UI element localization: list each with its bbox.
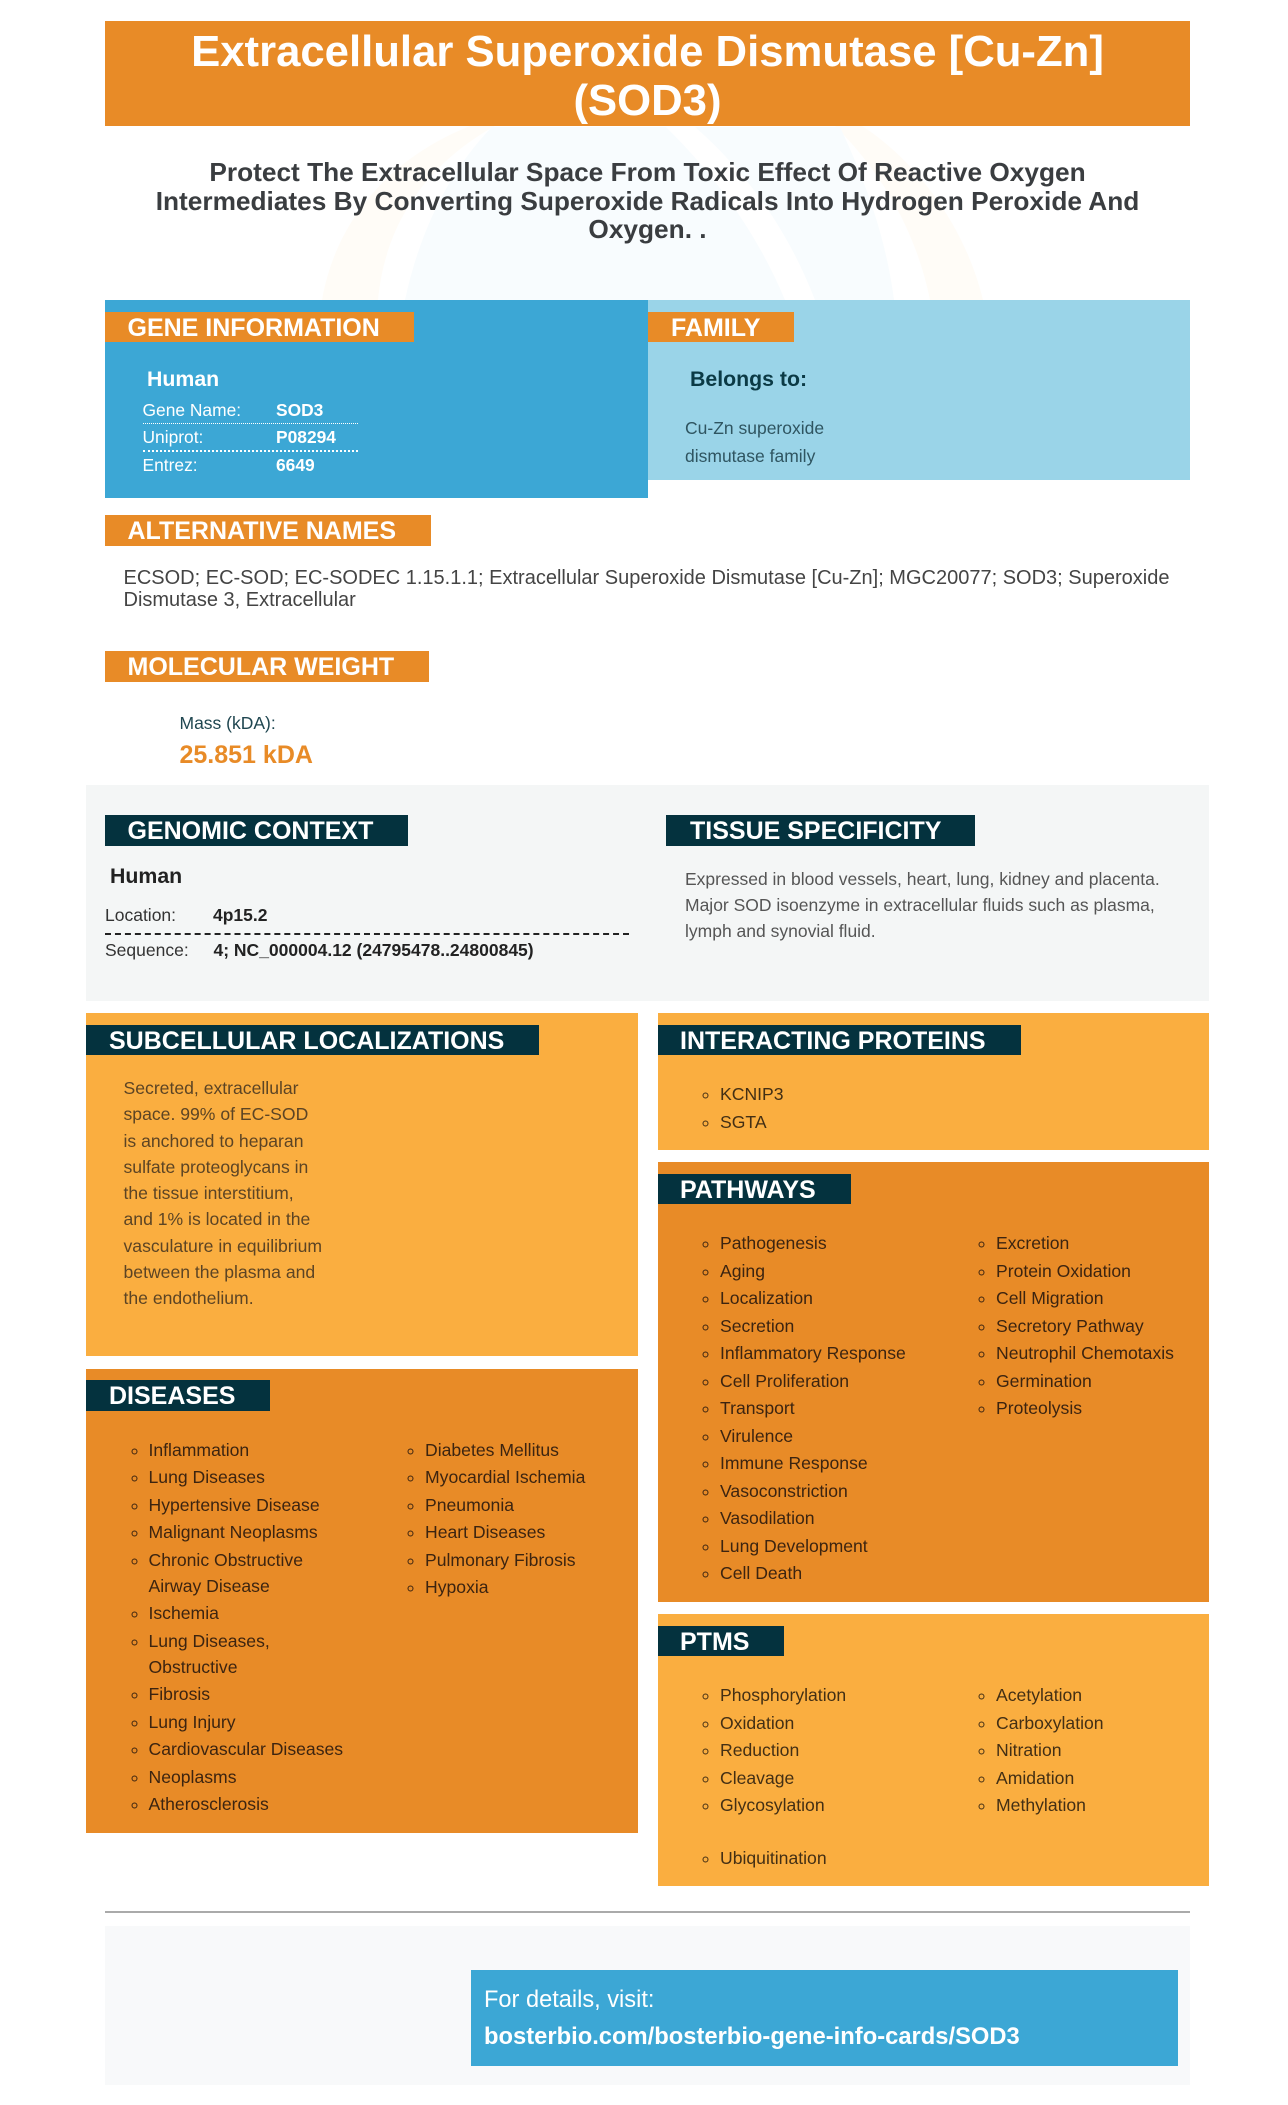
- pathway list column 2: Proteolysis: [996, 1398, 1082, 1418]
- disease list column 1: Atherosclerosis: [148, 1794, 269, 1814]
- protein list: SGTA: [720, 1112, 767, 1132]
- pathway list column 1: Secretion: [720, 1316, 794, 1336]
- pathway list column 1: Aging: [720, 1260, 765, 1280]
- panel: diseases: [86, 1369, 638, 1833]
- alternative names text: ECSOD; EC-SOD; EC-SODEC 1.15.1.1; Extracellular Superoxide Dismutase [Cu-Zn]; MGC20077; SOD3; Superoxide Dismutase 3, Extracellular: [124, 567, 1169, 611]
- background watermark logo: [0, 0, 1288, 310]
- pathway list column 2: [978, 1233, 1174, 1418]
- tissue specificity text: lymph and synovial fluid.: [685, 921, 876, 941]
- heading: subcellular localizations: SUBCELLULAR LOCALIZATIONS: [109, 1027, 504, 1055]
- ptm list column 1: Reduction: [720, 1740, 799, 1760]
- panel: family: [648, 300, 1190, 480]
- family text: Cu-Zn superoxide: [685, 418, 824, 438]
- ptm list column 2: Nitration: [996, 1740, 1062, 1760]
- gene name row: Gene Name:: [142, 400, 241, 420]
- ptm list column 2: Methylation: [996, 1795, 1086, 1815]
- pathway list column 1: Cell Death: [720, 1563, 802, 1583]
- ptm list column 1: Phosphorylation: [720, 1685, 846, 1705]
- pathway list column 1: Vasoconstriction: [720, 1480, 848, 1500]
- mass label: Mass (kDA):: [180, 713, 276, 733]
- pathway list column 1: Cell Proliferation: [720, 1370, 849, 1390]
- disease list column 2: [408, 1440, 586, 1597]
- heading: diseases: DISEASES: [109, 1382, 235, 1410]
- panel: subcellular localizations: [86, 1013, 638, 1356]
- panel: genomic context and tissue specificity: [86, 785, 1209, 1001]
- ptm list column 2: Carboxylation: [996, 1712, 1104, 1732]
- location row: Location:: [105, 905, 176, 925]
- disease list column 1: Malignant Neoplasms: [148, 1522, 318, 1542]
- disease list column 2: Pulmonary Fibrosis: [425, 1550, 576, 1570]
- ptm list extra item: Ubiquitination: [720, 1848, 827, 1868]
- details label: For details, visit:: [484, 1987, 654, 2013]
- heading: molecular weight: MOLECULAR WEIGHT: [128, 653, 394, 681]
- gene name row: SOD3: [276, 400, 323, 420]
- ptm list column 2: [978, 1685, 1104, 1815]
- pathway list column 1: Virulence: [720, 1426, 793, 1446]
- tissue specificity text: [685, 869, 1160, 941]
- localization text: space. 99% of EC-SOD: [124, 1104, 308, 1124]
- family text: dismutase family: [685, 446, 815, 466]
- panel: pathways: [658, 1162, 1209, 1602]
- disease list column 1: Chronic Obstructive: [148, 1550, 303, 1570]
- disease list column 1: Neoplasms: [148, 1766, 237, 1786]
- heading: interacting proteins: INTERACTING PROTEINS: [680, 1027, 986, 1055]
- disease list column 2: Hypoxia: [425, 1577, 489, 1597]
- ptm list column 1: Oxidation: [720, 1712, 794, 1732]
- localization text: between the plasma and: [124, 1262, 315, 1282]
- localization text: sulfate proteoglycans in: [124, 1157, 308, 1177]
- localization text: the endothelium.: [124, 1288, 254, 1308]
- molecular weight value: [180, 713, 313, 769]
- belongs to label: Belongs to:: [690, 366, 807, 390]
- uniprot row: [142, 424, 358, 452]
- localization text: vasculature in equilibrium: [124, 1236, 322, 1256]
- disease list column 2: Diabetes Mellitus: [425, 1440, 559, 1460]
- protein list: [702, 1084, 784, 1132]
- pathway list column 1: Immune Response: [720, 1453, 868, 1473]
- disease list column 1: Ischemia: [148, 1603, 219, 1623]
- disease list column 1: Lung Diseases,: [148, 1630, 270, 1650]
- location row: [105, 902, 629, 935]
- pathway list column 1: Inflammatory Response: [720, 1343, 906, 1363]
- localization text: is anchored to heparan: [124, 1130, 303, 1150]
- species label: Human: [147, 366, 219, 390]
- subtitle: protein function: [156, 157, 1139, 244]
- tissue specificity text: Major SOD isoenzyme in extracellular fluids such as plasma,: [685, 895, 1155, 915]
- disease list column 1: Hypertensive Disease: [148, 1494, 320, 1514]
- localization text: [124, 1078, 322, 1308]
- mass value: 25.851 kDA: [180, 741, 313, 769]
- heading: family: [648, 312, 794, 342]
- localization text: Secreted, extracellular: [124, 1078, 299, 1098]
- entrez row: [142, 455, 315, 475]
- ptm list column 1: Cleavage: [720, 1768, 794, 1788]
- sequence row: Sequence:: [105, 940, 189, 960]
- disease list column 2: Pneumonia: [425, 1494, 514, 1514]
- disease list column 2: Heart Diseases: [425, 1522, 545, 1542]
- gene name row: [142, 397, 358, 424]
- localization text: the tissue interstitium,: [124, 1183, 294, 1203]
- heading: family: FAMILY: [671, 314, 760, 342]
- disease list column 1: Inflammation: [148, 1440, 249, 1460]
- title banner: [105, 21, 1190, 126]
- localization text: and 1% is located in the: [124, 1209, 310, 1229]
- ptm list column 1: Glycosylation: [720, 1795, 825, 1815]
- pathway list column 2: Germination: [996, 1370, 1092, 1390]
- pathway list column 1: Lung Development: [720, 1536, 868, 1556]
- pathway list column 2: Excretion: [996, 1233, 1069, 1253]
- heading: alternative names: ALTERNATIVE NAMES: [128, 517, 396, 545]
- disease list column 1: Airway Disease: [148, 1576, 270, 1596]
- callout: details link: [471, 1970, 1178, 2066]
- heading: diseases: [86, 1380, 270, 1411]
- sequence row: 4; NC_000004.12 (24795478..24800845): [214, 940, 534, 960]
- heading: ptms: PTMS: [680, 1628, 749, 1656]
- disease list column 1: Lung Diseases: [148, 1467, 265, 1487]
- entrez row: Entrez:: [142, 455, 198, 475]
- ptm list column 2: Amidation: [996, 1768, 1074, 1788]
- panel: ptms: [658, 1614, 1209, 1886]
- disease list column 1: Cardiovascular Diseases: [148, 1739, 343, 1759]
- uniprot row: Uniprot:: [142, 427, 203, 447]
- pathway list column 2: Neutrophil Chemotaxis: [996, 1343, 1174, 1363]
- pathway list column 2: Protein Oxidation: [996, 1260, 1131, 1280]
- subtitle: protein function: Oxygen. .: [588, 214, 707, 244]
- ptm list column 1: [702, 1685, 846, 1815]
- species label: Human: [110, 864, 182, 888]
- pathway list column 1: Transport: [720, 1398, 795, 1418]
- heading: pathways: [658, 1174, 851, 1204]
- footer panel: [105, 1926, 1190, 2085]
- tissue specificity text: Expressed in blood vessels, heart, lung, kidney and placenta.: [685, 869, 1160, 889]
- pathway list column 1: Localization: [720, 1288, 813, 1308]
- disease list column 2: Myocardial Ischemia: [425, 1467, 585, 1487]
- pathway list column 1: Vasodilation: [720, 1508, 815, 1528]
- family text: [685, 418, 824, 466]
- panel: gene information: [105, 300, 648, 498]
- heading: gene information: GENE INFORMATION: [128, 314, 380, 342]
- heading: genomic context: GENOMIC CONTEXT: [128, 817, 373, 845]
- entrez row: 6649: [276, 455, 315, 475]
- title banner: (SOD3): [573, 76, 722, 124]
- uniprot row: P08294: [276, 427, 336, 447]
- pathway list column 2: Cell Migration: [996, 1288, 1104, 1308]
- disease list column 1: Lung Injury: [148, 1712, 236, 1732]
- disease list column 1: [132, 1440, 343, 1814]
- subtitle: protein function: Protect The Extracellular Space From Toxic Effect Of Reactive Oxygen: [209, 157, 1086, 187]
- pathway list column 2: Secretory Pathway: [996, 1316, 1144, 1336]
- disease list column 1: Fibrosis: [148, 1684, 210, 1704]
- heading: ptms: [658, 1626, 784, 1656]
- panel: interacting proteins: [658, 1013, 1209, 1150]
- pathway list column 1: [702, 1233, 906, 1583]
- heading: pathways: PATHWAYS: [680, 1176, 816, 1204]
- heading: tissue specificity: TISSUE SPECIFICITY: [690, 817, 941, 845]
- ptm list column 2: Acetylation: [996, 1685, 1082, 1705]
- pathway list column 1: Pathogenesis: [720, 1233, 827, 1253]
- details url: bosterbio.com/bosterbio-gene-info-cards/SOD3: [484, 2023, 1020, 2050]
- protein list: KCNIP3: [720, 1084, 784, 1104]
- title banner: Extracellular Superoxide Dismutase [Cu-Zn]: [191, 27, 1104, 76]
- subtitle: protein function: Intermediates By Converting Superoxide Radicals Into Hydrogen Peroxide And: [156, 186, 1139, 216]
- disease list column 1: Obstructive: [148, 1656, 237, 1676]
- location row: 4p15.2: [213, 905, 267, 925]
